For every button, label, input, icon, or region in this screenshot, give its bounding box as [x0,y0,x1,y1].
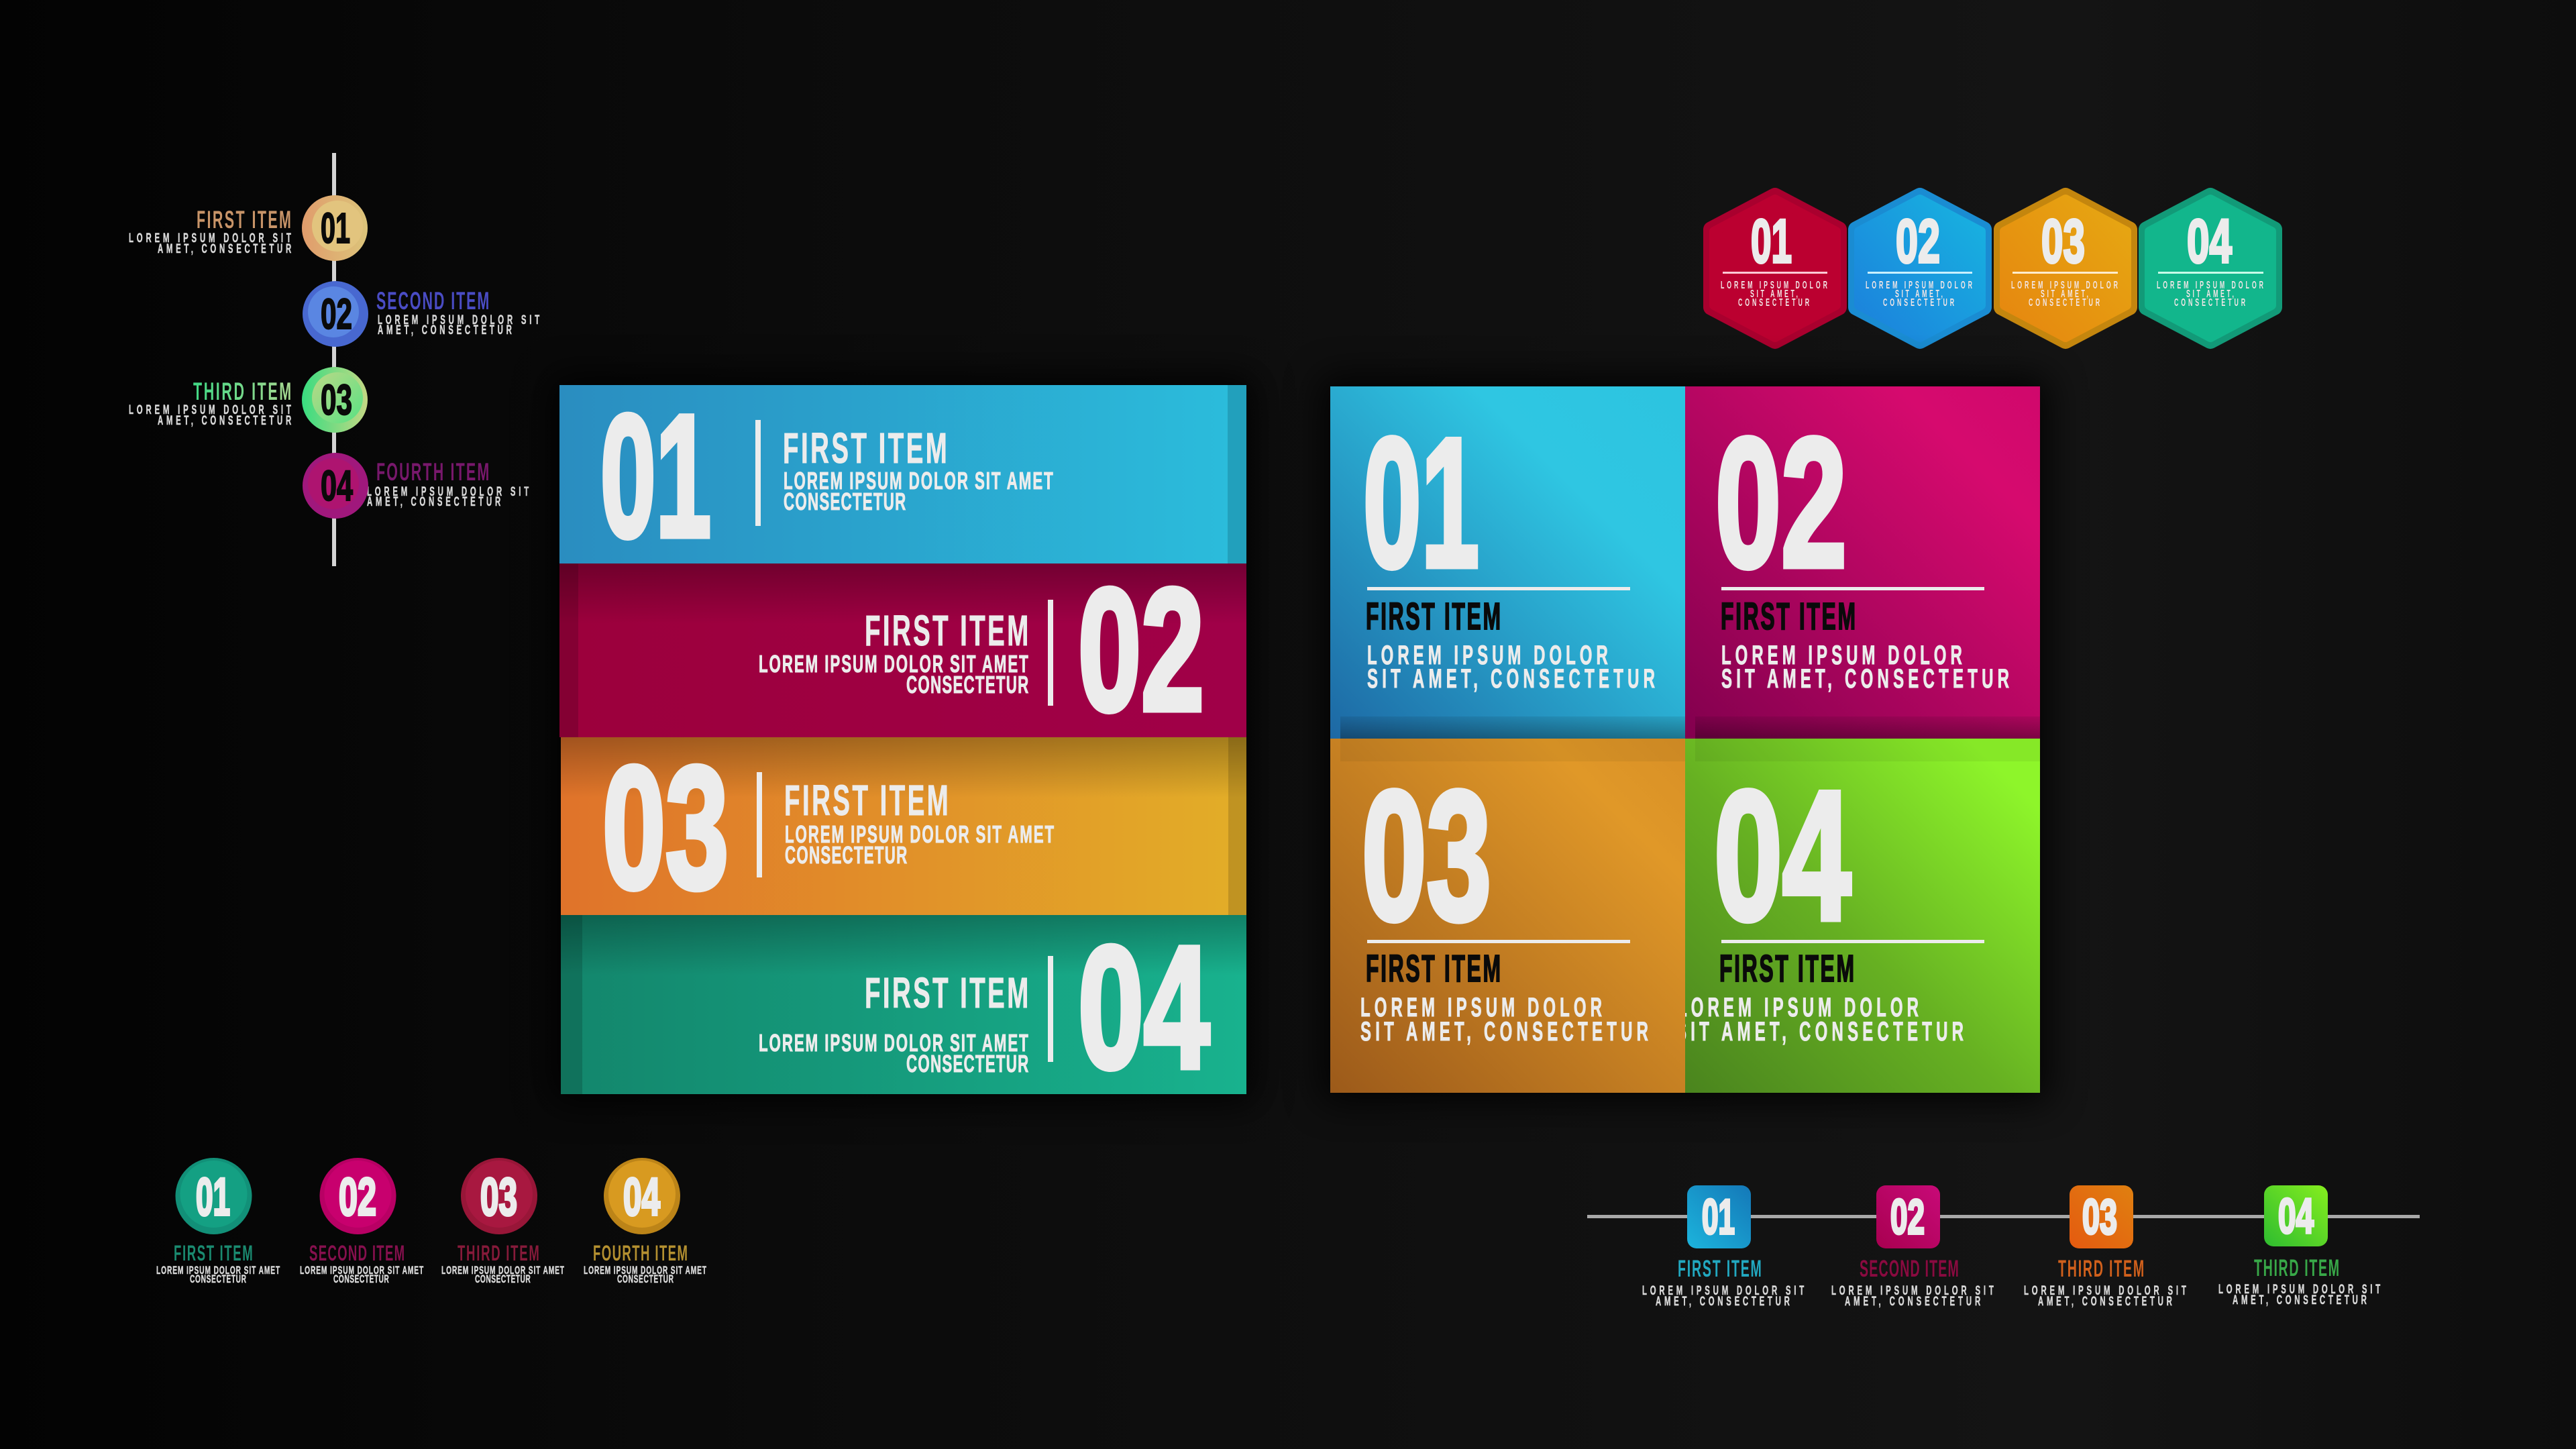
tile 2: LOREM IPSUM DOLOR [1721,640,1962,669]
timeline axis [332,153,336,566]
square item 3: AMET, CONSECTETUR [2038,1295,2172,1309]
timeline item 3 text: LOREM IPSUM DOLOR SIT [129,403,291,417]
tile 4: FIRST ITEM [1719,947,1854,989]
band 4: LOREM IPSUM DOLOR SIT AMET [759,1030,1028,1057]
horizontal axis [1587,1215,2420,1218]
hexagon 3 [2002,196,2129,341]
circle item 1: 01 [196,1167,230,1226]
panel: four-colour grid [1322,377,2049,1102]
timeline item 3 badge: 03 [321,376,352,424]
square item 2: AMET, CONSECTETUR [1845,1295,1980,1309]
timeline item 2 text: SECOND ITEM [376,288,489,315]
timeline item 3 text [129,378,291,428]
circle item 3: 03 [480,1167,517,1226]
timeline item 2 badge [303,281,368,347]
circle item 2: CONSECTETUR [333,1272,389,1285]
square item 2: SECOND ITEM [1860,1256,1959,1283]
tile 4: 04 [1714,753,1851,959]
panel shadow [550,376,1256,1104]
square item 2 [1831,1185,1994,1309]
band 4: 04 [1078,910,1210,1104]
band 2: 02 [1078,553,1204,747]
circle item 4: 04 [623,1167,660,1226]
band 4: FIRST ITEM [865,969,1028,1018]
tile 1 [1330,386,1686,739]
hexagon 4: SIT AMET, [2186,287,2234,300]
hexagon 1: CONSECTETUR [1738,296,1810,309]
hexagon 1: SIT AMET, [1750,287,1798,300]
square item 3: THIRD ITEM [2058,1256,2144,1283]
square item 4: 04 [2278,1189,2314,1244]
band 3: 03 [602,731,729,924]
timeline item 1 text [129,207,291,256]
tile 3: SIT AMET, CONSECTETUR [1360,1016,1648,1046]
square item 3: 03 [2082,1190,2117,1244]
timeline item 2 badge: 02 [321,290,352,338]
square item 1: LOREM IPSUM DOLOR SIT [1642,1284,1805,1298]
tile 4: LOREM IPSUM DOLOR [1677,992,1919,1022]
square item 1: FIRST ITEM [1678,1256,1762,1283]
hexagon 3: SIT AMET, [2041,287,2088,300]
square item 3: LOREM IPSUM DOLOR SIT [2024,1284,2186,1298]
band 3 [561,731,1246,924]
timeline item 1 text: LOREM IPSUM DOLOR SIT [129,231,291,246]
tile 1: FIRST ITEM [1366,594,1501,637]
band 2: CONSECTETUR [906,672,1028,698]
timeline item 3 text: AMET, CONSECTETUR [158,414,291,428]
circle item 4: FOURTH ITEM [593,1241,688,1265]
timeline item 4 text [367,459,529,509]
square item 4: AMET, CONSECTETUR [2233,1293,2367,1307]
timeline item 4 badge [303,453,368,519]
grid shadow [1322,377,2049,1102]
band 3: LOREM IPSUM DOLOR SIT AMET [785,822,1054,848]
hexagon 1: 01 [1751,207,1792,276]
band 1: FIRST ITEM [783,425,947,473]
circle row [156,1158,706,1285]
tile 3: LOREM IPSUM DOLOR [1360,992,1602,1022]
hexagon 4 [2147,196,2274,341]
square item 1 [1642,1185,1805,1309]
circle item 3: THIRD ITEM [458,1241,539,1265]
tile 4: SIT AMET, CONSECTETUR [1676,1016,1964,1046]
circle item 3 [441,1158,564,1285]
square item 2: 02 [1890,1190,1925,1244]
circle item 2 [300,1158,424,1285]
tile 1: SIT AMET, CONSECTETUR [1367,663,1655,693]
timeline item 3 text: THIRD ITEM [193,378,291,406]
timeline item 2 text: AMET, CONSECTETUR [378,323,512,337]
hexagon 2: LOREM IPSUM DOLOR [1866,278,1972,291]
circle item 1 [156,1158,280,1285]
hexagon 4: CONSECTETUR [2174,296,2246,309]
timeline item 1 text: AMET, CONSECTETUR [158,242,291,256]
band 1: LOREM IPSUM DOLOR SIT AMET [784,468,1053,494]
timeline item 4 badge: 04 [321,462,353,510]
band 1 [559,379,1246,573]
timeline item 2 text: LOREM IPSUM DOLOR SIT [378,313,540,327]
band 2: LOREM IPSUM DOLOR SIT AMET [759,651,1028,678]
tile 3: FIRST ITEM [1366,947,1501,989]
band 2 [559,553,1246,747]
circle item 2: SECOND ITEM [309,1241,405,1265]
square item 1: AMET, CONSECTETUR [1656,1295,1790,1309]
hexagon 1 [1711,196,1839,341]
timeline item 1 text: FIRST ITEM [197,207,291,234]
timeline item 1 badge: 01 [321,204,350,252]
band 4: CONSECTETUR [906,1051,1028,1077]
hexagon 2: CONSECTETUR [1883,296,1955,309]
circle item 4 [584,1158,706,1285]
hexagon 2: 02 [1896,207,1940,276]
square item 4 [2218,1185,2381,1307]
tile 3: 03 [1362,753,1491,959]
circle item 4: LOREM IPSUM DOLOR SIT AMET [584,1263,706,1277]
square item 3 [2024,1185,2186,1309]
circle item 1: FIRST ITEM [174,1241,253,1265]
hexagon 3: 03 [2041,207,2085,276]
hexagon 2 [1856,196,1984,341]
timeline item 4 text: LOREM IPSUM DOLOR SIT [367,485,529,499]
timeline: vertical list [129,153,540,566]
tile 2: SIT AMET, CONSECTETUR [1721,663,2009,693]
band 3: FIRST ITEM [784,777,949,825]
tile 3 [1330,739,1686,1093]
hexagon 1: LOREM IPSUM DOLOR [1721,278,1827,291]
square item 1: 01 [1702,1190,1735,1244]
circle item 4: CONSECTETUR [617,1272,674,1285]
hexagon 4: 04 [2187,207,2232,276]
panel: stacked bands [550,376,1256,1104]
hexagon row [1711,196,2274,341]
band 3: CONSECTETUR [785,843,907,869]
band 1: 01 [600,379,711,573]
tile 2 [1685,386,2040,739]
hexagon 3: LOREM IPSUM DOLOR [2011,278,2118,291]
square item 2: LOREM IPSUM DOLOR SIT [1831,1284,1994,1298]
timeline item 3 badge [302,367,368,433]
hexagon 2: SIT AMET, [1895,287,1943,300]
band 2: FIRST ITEM [865,607,1028,655]
tile 2: FIRST ITEM [1721,594,1856,637]
band 1: CONSECTETUR [784,489,906,515]
tile 2: 02 [1715,400,1847,606]
tile 4 [1676,739,2040,1093]
timeline item 4 text: FOURTH ITEM [376,459,489,486]
circle item 1: LOREM IPSUM DOLOR SIT AMET [156,1263,280,1277]
timeline item 2 text [376,288,540,337]
circle item 2: LOREM IPSUM DOLOR SIT AMET [300,1263,424,1277]
circle item 3: CONSECTETUR [475,1272,531,1285]
timeline item 4 text: AMET, CONSECTETUR [367,495,500,509]
square item 4: LOREM IPSUM DOLOR SIT [2218,1283,2381,1297]
circle item 1: CONSECTETUR [190,1272,246,1285]
horizontal timeline [1587,1185,2420,1309]
hexagon 4: LOREM IPSUM DOLOR [2157,278,2263,291]
band 4 [561,910,1246,1104]
hexagon 3: CONSECTETUR [2029,296,2100,309]
tile 1: LOREM IPSUM DOLOR [1367,640,1608,669]
circle item 3: LOREM IPSUM DOLOR SIT AMET [441,1263,564,1277]
timeline item 1 badge [302,195,368,261]
square item 4: THIRD ITEM [2254,1255,2339,1282]
circle item 2: 02 [339,1167,376,1226]
tile 1: 01 [1363,400,1479,606]
